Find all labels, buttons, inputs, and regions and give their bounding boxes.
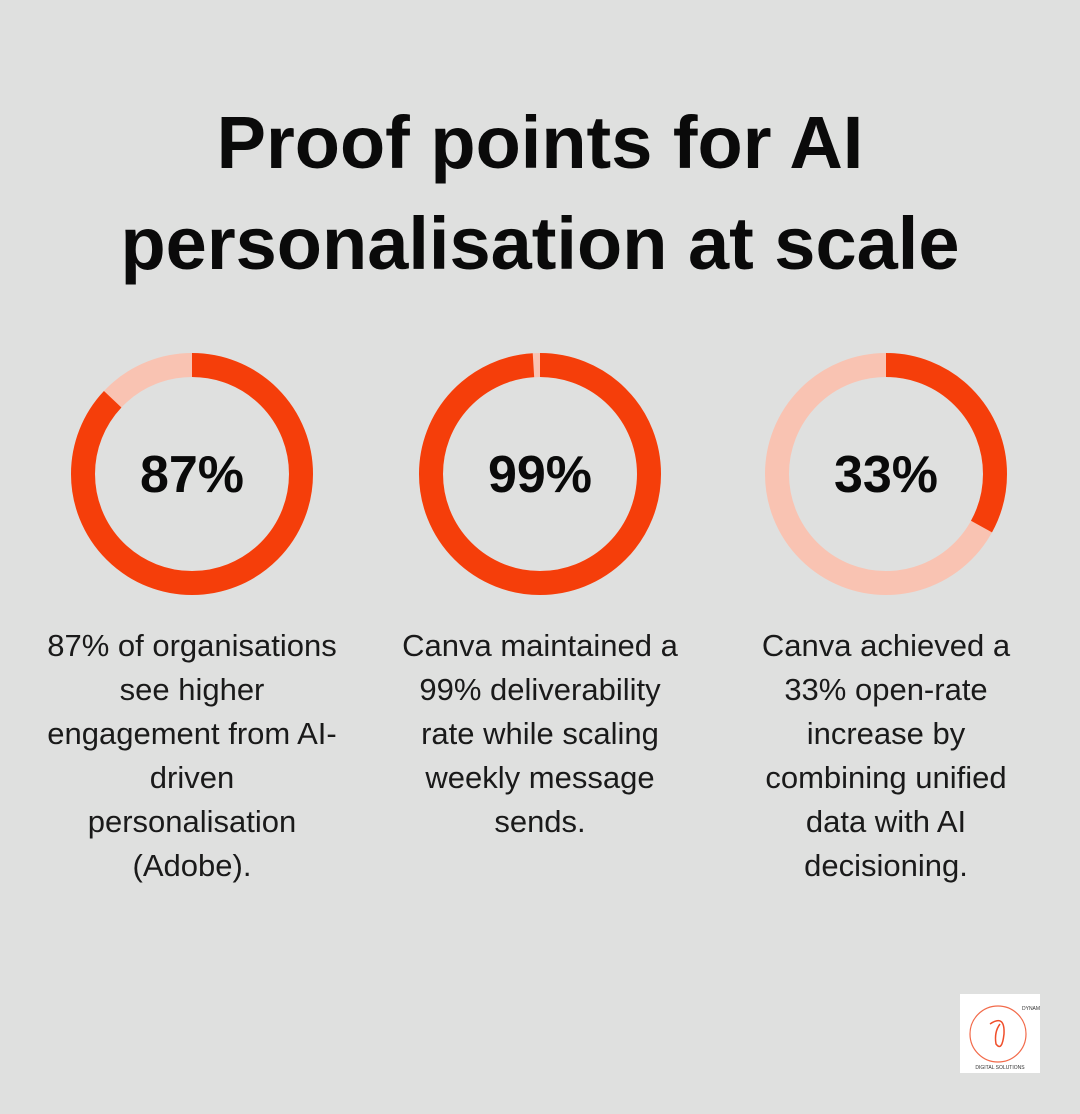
title: personalisation at scale xyxy=(120,202,960,285)
logo xyxy=(960,994,1040,1073)
donut: 99%: 99% xyxy=(488,446,592,504)
donut: 87%: 87% xyxy=(140,446,244,504)
caption: 33%: data with AI xyxy=(806,804,966,839)
title xyxy=(120,101,960,285)
caption: 33%: increase by xyxy=(807,716,965,751)
caption: 99%: Canva maintained a xyxy=(402,628,678,663)
logo: DIGITAL SOLUTIONS xyxy=(975,1065,1025,1071)
donut: 33% xyxy=(765,353,1007,595)
caption: 33% xyxy=(762,628,1010,883)
caption: 33%: 33% open-rate xyxy=(784,672,988,707)
caption: 99%: rate while scaling xyxy=(421,716,659,751)
title: Proof points for AI xyxy=(217,101,863,184)
caption: 87% xyxy=(47,628,337,883)
donut: 87% xyxy=(71,353,313,595)
caption: 87%: personalisation xyxy=(88,804,296,839)
caption: 99%: 99% deliverability xyxy=(419,672,661,707)
caption: 99%: sends. xyxy=(494,804,586,839)
caption: 99% xyxy=(402,628,678,839)
donut: 99% xyxy=(419,353,661,595)
caption: 87%: driven xyxy=(150,760,234,795)
donut: 33%: 33% xyxy=(834,446,938,504)
caption: 87%: engagement from AI- xyxy=(47,716,337,751)
caption: 33%: decisioning. xyxy=(804,848,968,883)
caption: 33%: combining unified xyxy=(765,760,1007,795)
caption: 87%: see higher xyxy=(120,672,264,707)
caption: 87%: (Adobe). xyxy=(133,848,251,883)
caption: 33%: Canva achieved a xyxy=(762,628,1010,663)
caption: 99%: weekly message xyxy=(425,760,655,795)
caption: 87%: 87% of organisations xyxy=(47,628,337,663)
